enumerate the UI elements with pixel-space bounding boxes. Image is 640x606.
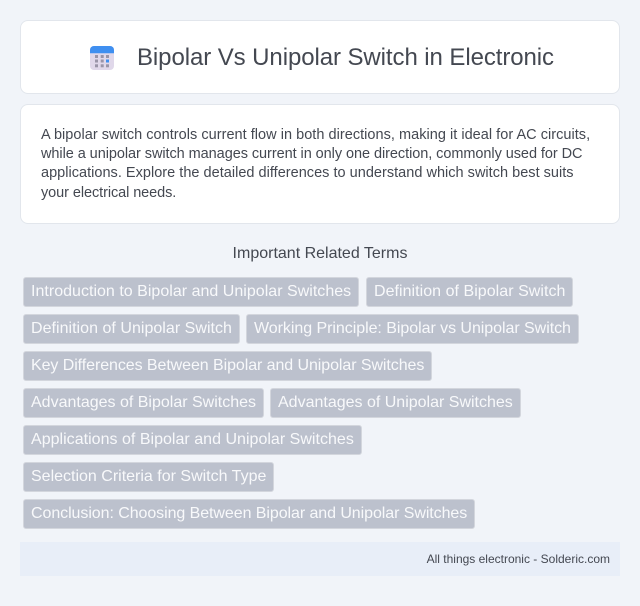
description text (41, 127, 590, 201)
description text: A bipolar switch controls current flow in both directions, making it ideal for AC circuits, (41, 127, 590, 143)
tag (270, 388, 521, 418)
tag (23, 499, 475, 529)
description text: while a unipolar switch manages current in only one direction, commonly used for DC (41, 146, 582, 162)
description text: applications. Explore the detailed differences to understand which switch best suits (41, 165, 574, 181)
related terms tags (23, 277, 579, 529)
section heading: Important Related Terms (233, 245, 407, 262)
tag (366, 277, 573, 307)
tag (23, 277, 359, 307)
description card (20, 104, 620, 224)
tag: Key Differences Between Bipolar and Unipolar Switches (31, 357, 424, 374)
description text: your electrical needs. (41, 185, 176, 201)
tag: Conclusion: Choosing Between Bipolar and Unipolar Switches (31, 505, 467, 522)
tag (23, 425, 362, 455)
tag (23, 462, 274, 492)
tag: Definition of Bipolar Switch (374, 283, 565, 300)
tag (23, 351, 432, 381)
header card (20, 20, 620, 94)
tag: Advantages of Unipolar Switches (278, 394, 513, 411)
tag: Definition of Unipolar Switch (31, 320, 232, 337)
tag: Working Principle: Bipolar vs Unipolar Switch (254, 320, 571, 337)
tag: Applications of Bipolar and Unipolar Switches (31, 431, 354, 448)
title: Bipolar Vs Unipolar Switch in Electronic (137, 44, 554, 71)
footer bar (20, 542, 620, 576)
tag: Advantages of Bipolar Switches (31, 394, 256, 411)
tag: Introduction to Bipolar and Unipolar Switches (31, 283, 351, 300)
tag (23, 314, 240, 344)
footer text: All things electronic - Solderic.com (427, 552, 610, 566)
tag (246, 314, 579, 344)
tag: Selection Criteria for Switch Type (31, 468, 266, 485)
tag (23, 388, 264, 418)
icon: calendar (90, 46, 114, 70)
